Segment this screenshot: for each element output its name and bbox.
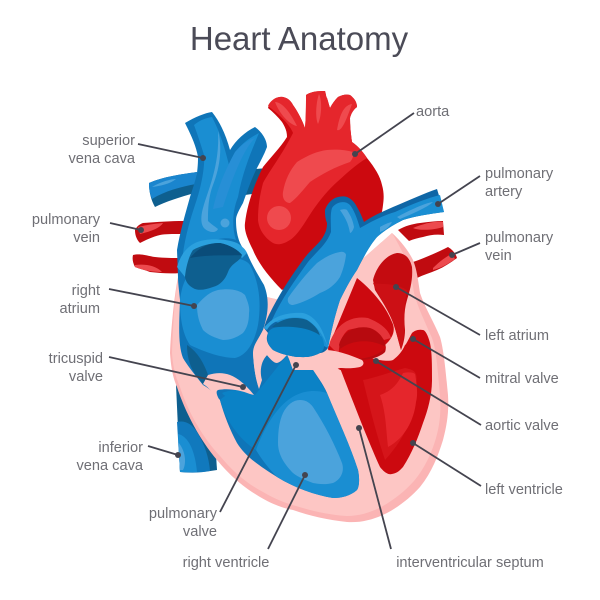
label: tricuspid valve: valve — [69, 369, 103, 385]
label: inferior vena cava: inferior — [98, 440, 143, 456]
title: Heart Anatomy — [190, 20, 409, 57]
pulmonary artery — [264, 189, 444, 357]
label: superior vena cava: superior — [82, 133, 135, 149]
pink valve band — [300, 350, 363, 372]
back pulmonary branch — [149, 168, 268, 207]
label: aortic valve: aortic valve — [485, 418, 559, 434]
label: interventricular septum: interventricular septum — [396, 555, 544, 571]
label: inferior vena cava: vena cava — [76, 458, 144, 474]
label: tricuspid valve: tricuspid — [49, 351, 103, 367]
label: pulmonary valve: valve — [183, 524, 217, 540]
pulmonary veins right — [398, 221, 457, 278]
label: mitral valve: mitral valve — [485, 371, 559, 387]
label: left atrium: left atrium — [485, 328, 549, 344]
heart wall — [170, 233, 448, 522]
label: right ventricle: right ventricle — [183, 555, 269, 571]
right atrium, superior vena cava and right ventricle — [177, 112, 359, 498]
leader dots — [138, 151, 455, 478]
leader lines — [109, 113, 481, 549]
label: pulmonary vein left: pulmonary — [32, 212, 100, 228]
pulmonary veins left — [133, 221, 184, 273]
label: pulmonary valve: pulmonary — [149, 506, 217, 522]
pink septum spike and tricuspid flap — [253, 330, 300, 389]
label: superior vena cava: vena cava — [68, 151, 136, 167]
label: right atrium: atrium — [59, 301, 100, 317]
label: pulmonary artery: pulmonary — [485, 166, 553, 182]
label: pulmonary vein right: vein — [485, 248, 512, 264]
label: pulmonary vein left: vein — [73, 230, 100, 246]
aorta — [245, 91, 384, 290]
inferior vena cava — [176, 385, 217, 473]
label: right atrium: right — [72, 283, 100, 299]
heart illustration — [133, 91, 457, 522]
label: aorta: aorta — [416, 104, 450, 120]
label: left ventricle: left ventricle — [485, 482, 563, 498]
red chambers — [328, 253, 432, 474]
label: pulmonary vein right: pulmonary — [485, 230, 553, 246]
opening of vena cava — [177, 239, 247, 277]
label: pulmonary artery: artery — [485, 184, 523, 200]
